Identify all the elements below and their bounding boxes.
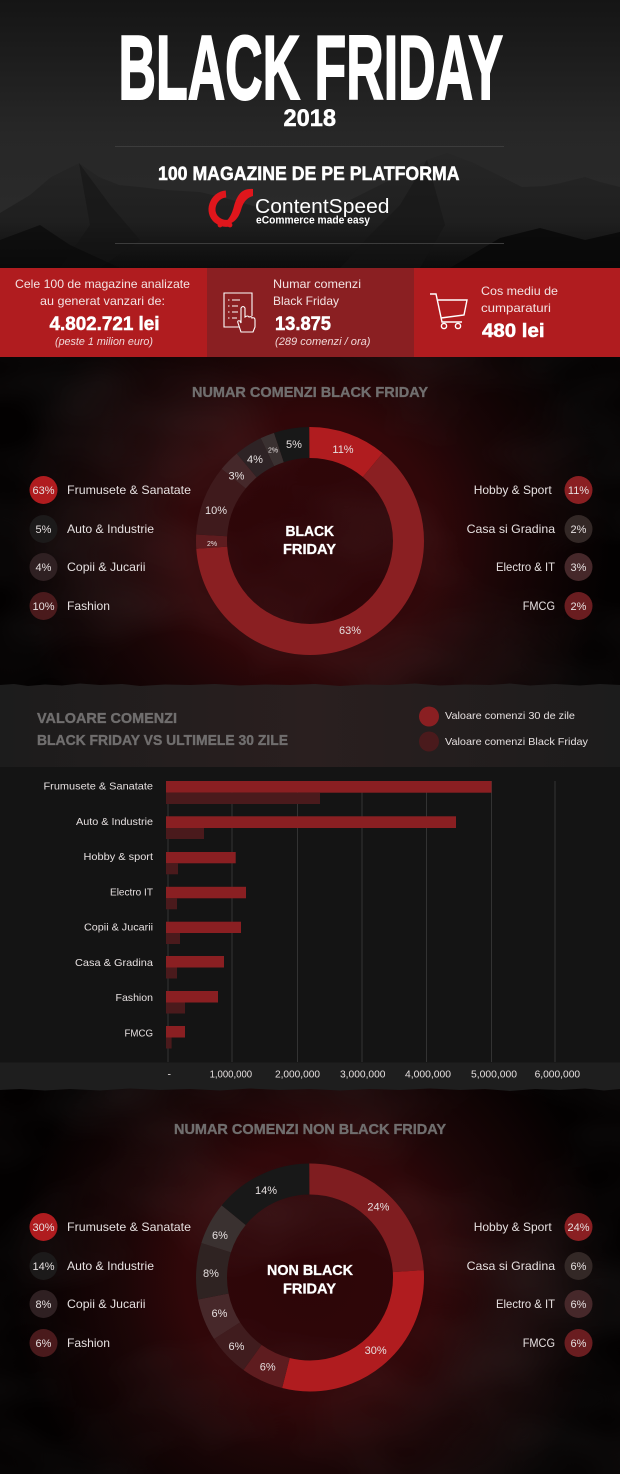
mountains backdrop — [0, 153, 620, 268]
legend: left: 63% — [32, 485, 55, 497]
legend: right: 2% — [571, 524, 587, 536]
legend: left — [30, 476, 191, 620]
stat: order count — [224, 277, 371, 348]
value axis: - — [168, 1068, 172, 1080]
category labels — [44, 780, 154, 1040]
legend: right — [467, 1213, 592, 1357]
donut chart: 8% — [203, 1268, 219, 1280]
category labels: Hobby & sport — [84, 851, 153, 863]
donut chart: 2% — [207, 541, 217, 548]
heading — [37, 711, 288, 749]
legend: left: 6% — [36, 1338, 52, 1350]
category labels: Casa & Gradina — [75, 957, 153, 969]
category labels: Electro IT — [110, 886, 154, 898]
legend: left: 5% — [36, 524, 52, 536]
donut chart: 30% — [365, 1345, 387, 1357]
logo: ContentSpeed: ContentSpeed — [255, 196, 390, 218]
logo: ContentSpeed — [212, 189, 390, 227]
donut chart: 6% — [212, 1230, 228, 1242]
donut chart: 3% — [229, 470, 245, 482]
heading: NUMAR COMENZI BLACK FRIDAY — [192, 384, 428, 401]
donut chart: 2% — [268, 448, 278, 454]
legend: left: Fashion — [67, 1336, 110, 1350]
stat: total sales: Cele 100 de magazine analizate — [15, 277, 190, 291]
donut chart: 6% — [229, 1341, 245, 1353]
stat: average basket: cumparaturi — [481, 301, 551, 315]
category labels: Auto & Industrie — [76, 816, 153, 828]
legend: left: 10% — [32, 601, 55, 613]
donut chart — [205, 439, 408, 640]
category labels: Copii & Jucarii — [84, 922, 153, 934]
stat: order count: Numar comenzi — [273, 277, 361, 291]
donut chart: 5% — [286, 439, 302, 451]
legend: right: 6% — [571, 1299, 587, 1311]
legend: right: Casa si Gradina — [467, 522, 555, 536]
stat: order count: (289 comenzi / ora) — [275, 336, 371, 348]
legend: right: Electro & IT — [496, 1297, 556, 1311]
stat: total sales: (peste 1 milion euro) — [55, 336, 153, 348]
donut center label — [267, 1262, 353, 1298]
donut chart — [203, 1179, 408, 1376]
legend: right: FMCG — [523, 599, 555, 613]
value axis: 5,000,000 — [471, 1068, 517, 1080]
panel: order value comparison — [0, 684, 620, 1091]
legend: right: 3% — [571, 562, 587, 574]
value axis: 4,000,000 — [405, 1068, 451, 1080]
icon: checklist with hand — [224, 293, 255, 332]
donut center label: NON BLACK — [267, 1262, 353, 1279]
legend: left: 30% — [32, 1222, 55, 1234]
panel: key figures — [0, 268, 620, 357]
donut chart: 6% — [260, 1362, 276, 1374]
legend: left — [30, 1213, 191, 1357]
legend: left: Fashion — [67, 599, 110, 613]
legend: right: 11% — [568, 485, 589, 497]
donut chart: 4% — [247, 454, 263, 466]
panel: orders non Black Friday — [0, 1085, 620, 1474]
value axis: 3,000,000 — [340, 1068, 386, 1080]
legend: left: 8% — [36, 1299, 52, 1311]
stat: total sales: 4.802.721 lei — [50, 314, 160, 335]
stat: average basket — [430, 284, 558, 342]
legend: right: 2% — [571, 601, 587, 613]
subtitle: 100 MAGAZINE DE PE PLATFORMA — [158, 164, 460, 185]
legend: left: Copii & Jucarii — [67, 1297, 146, 1311]
legend: right: Electro & IT — [496, 560, 556, 574]
legend: left: Frumusete & Sanatate — [67, 1220, 191, 1234]
legend: right: Hobby & Sport — [474, 483, 552, 497]
stat: order count: Black Friday — [273, 294, 339, 308]
legend: right: Hobby & Sport — [474, 1220, 552, 1234]
logo: ContentSpeed: eCommerce made easy — [256, 214, 371, 226]
legend: right — [467, 476, 592, 620]
donut chart: 14% — [255, 1185, 277, 1197]
heading: BLACK FRIDAY VS ULTIMELE 30 ZILE — [37, 733, 288, 749]
heading: NUMAR COMENZI NON BLACK FRIDAY — [174, 1121, 446, 1138]
legend: left: 4% — [36, 562, 52, 574]
legend: left: Auto & Industrie — [67, 522, 154, 536]
donut center label: FRIDAY — [283, 1280, 336, 1298]
donut center label — [283, 523, 336, 558]
panel: orders Black Friday — [0, 357, 620, 692]
category labels: Fashion — [116, 992, 153, 1004]
panel: header — [0, 0, 620, 268]
legend: right: Casa si Gradina — [467, 1259, 555, 1273]
stat: order count: 13.875 — [275, 314, 331, 335]
icon: logo mark — [212, 189, 253, 227]
legend: left: Copii & Jucarii — [67, 560, 146, 574]
value axis: 1,000,000 — [210, 1068, 252, 1080]
donut chart: 63% — [339, 625, 361, 637]
chart legend: Valoare comenzi 30 de zile — [445, 710, 575, 722]
bar chart — [44, 780, 580, 1080]
donut chart: 6% — [212, 1308, 228, 1320]
icon: shopping cart — [430, 294, 467, 329]
legend: right: FMCG — [523, 1336, 555, 1350]
category labels: FMCG — [124, 1028, 153, 1040]
stat: total sales — [15, 277, 190, 348]
category labels: Frumusete & Sanatate — [44, 780, 153, 792]
heading: VALOARE COMENZI — [37, 711, 177, 727]
value axis: 2,000,000 — [275, 1068, 320, 1080]
stat: average basket: Cos mediu de — [481, 284, 558, 298]
year: 2018 — [284, 105, 336, 132]
stat: average basket: 480 lei — [482, 321, 544, 342]
chart legend: Valoare comenzi Black Friday — [445, 736, 589, 748]
donut chart: 24% — [367, 1202, 390, 1214]
legend: right: 6% — [571, 1261, 587, 1273]
donut center label: FRIDAY — [283, 541, 336, 558]
donut center label: BLACK — [286, 523, 334, 540]
legend: right: 6% — [571, 1338, 587, 1350]
legend: left: 14% — [32, 1261, 55, 1273]
legend: left: Frumusete & Sanatate — [67, 483, 191, 497]
legend: right: 24% — [567, 1222, 590, 1234]
chart legend — [419, 706, 589, 752]
stat: total sales: au generat vanzari de: — [40, 294, 165, 308]
legend: left: Auto & Industrie — [67, 1259, 154, 1273]
value axis: 6,000,000 — [535, 1068, 580, 1080]
value axis — [168, 1068, 580, 1080]
donut chart: 11% — [332, 444, 354, 456]
donut chart: 10% — [205, 505, 227, 517]
